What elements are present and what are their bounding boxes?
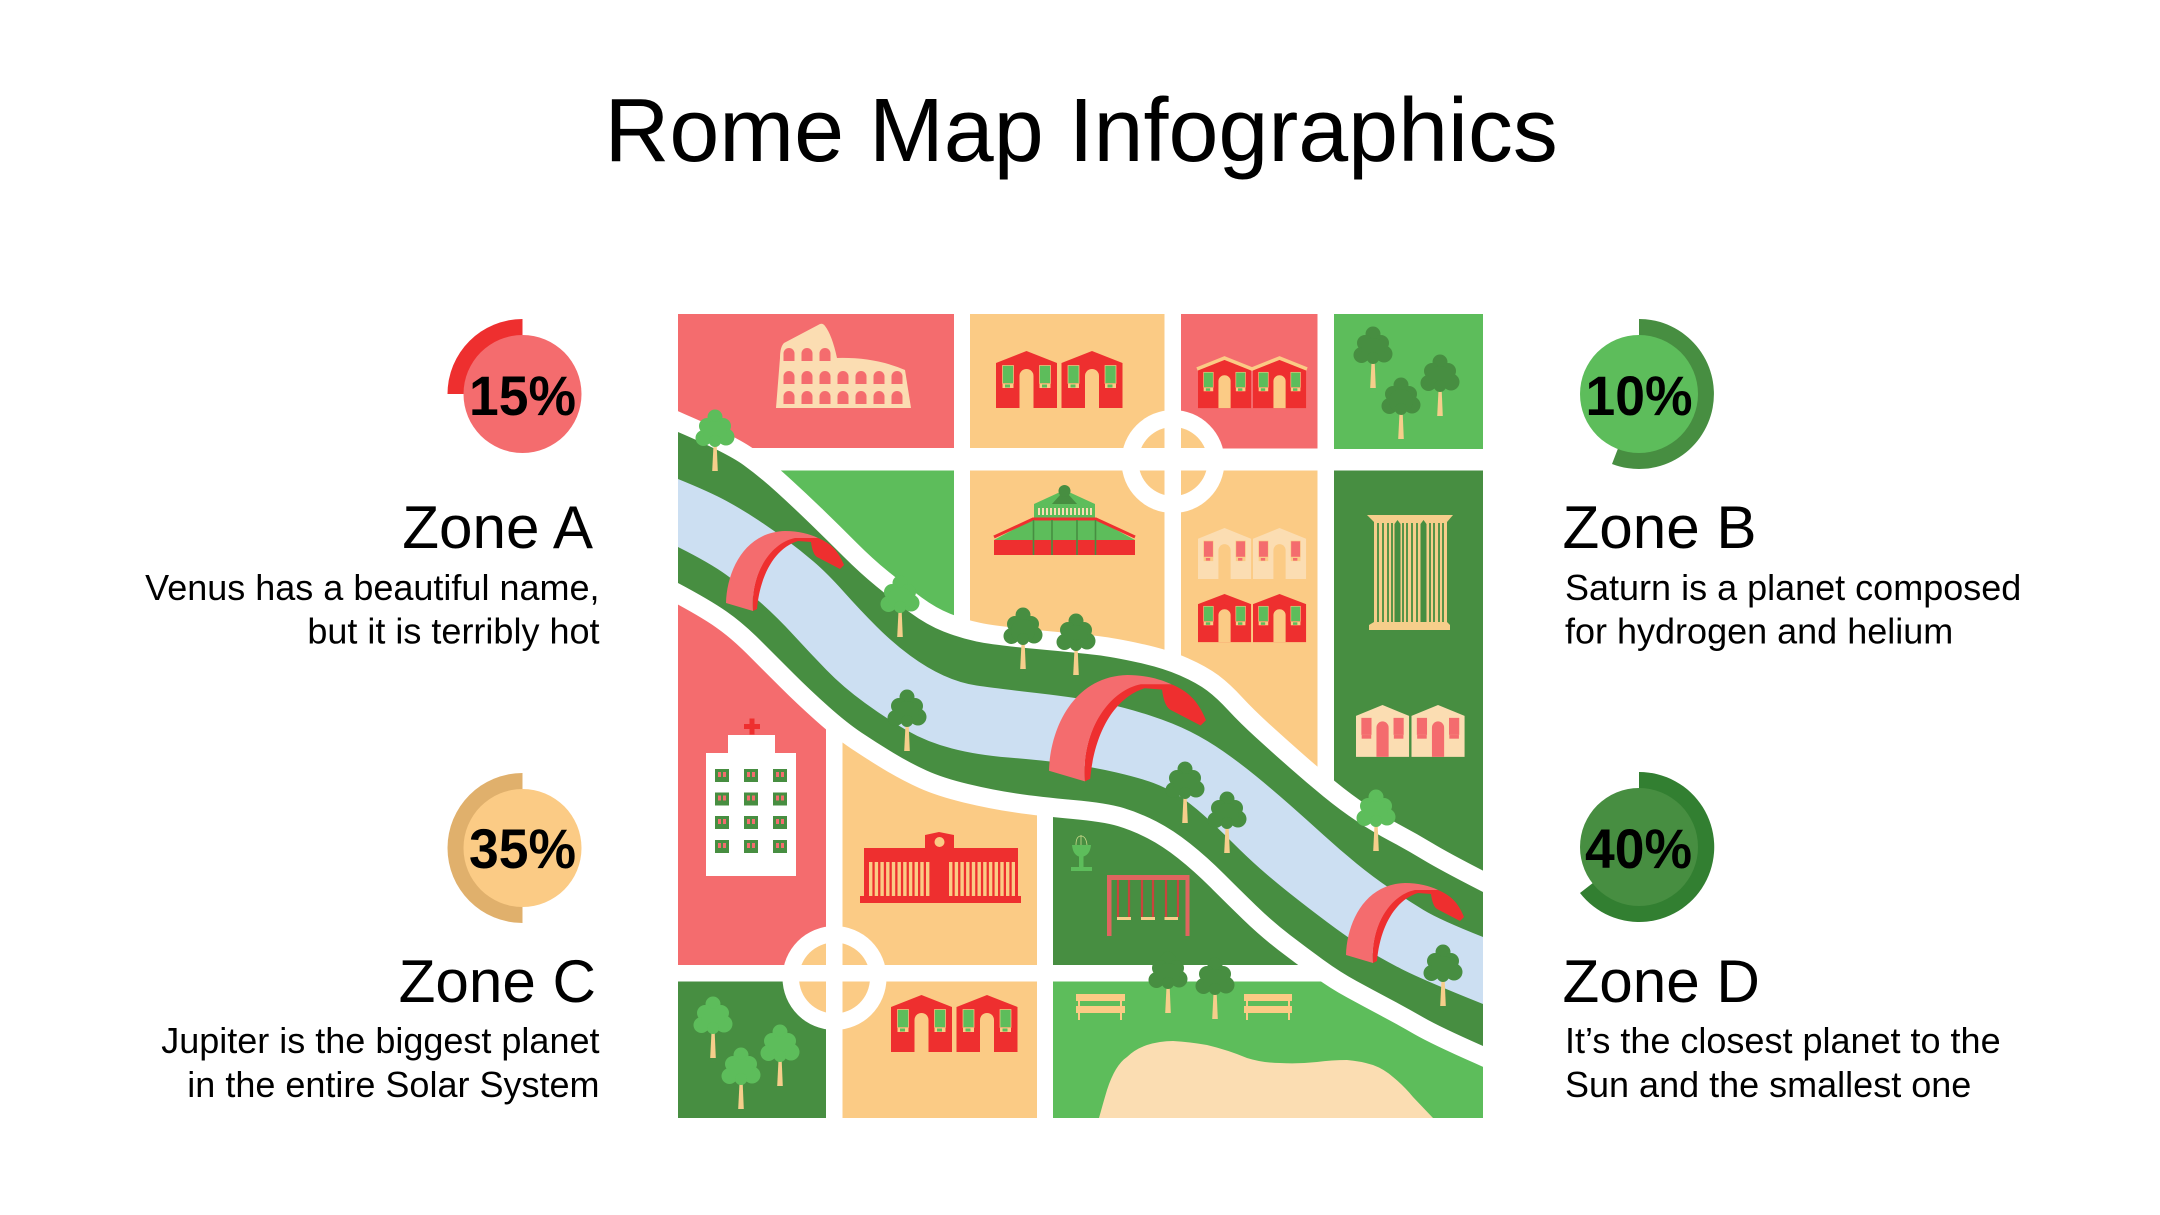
lower river road bbox=[620, 553, 1540, 1072]
icon: red houses with orange roofs bbox=[1197, 358, 1307, 408]
icon: green roof pavilion bbox=[994, 485, 1135, 555]
sand area bbox=[1099, 1041, 1433, 1118]
percent ring: 40%: 40% bbox=[1585, 817, 1692, 880]
description: Zone C: in the entire Solar System bbox=[187, 1064, 600, 1105]
bridge 3 bbox=[1346, 883, 1464, 963]
icon: fountain bbox=[1071, 835, 1092, 871]
map blocks bbox=[678, 314, 1483, 1118]
percent ring: 35%: 35% bbox=[469, 817, 576, 880]
roundabout: south bbox=[782, 926, 886, 1030]
percent ring: 35% bbox=[448, 773, 582, 923]
bridge 2 bbox=[1049, 675, 1206, 781]
icon: red houses, south block bbox=[891, 995, 1018, 1052]
heading: Zone B: Zone B bbox=[1562, 494, 1757, 561]
map of Rome bbox=[678, 314, 1483, 1118]
description: Zone A: but it is terribly hot bbox=[307, 610, 600, 652]
trees bbox=[694, 326, 1462, 1109]
description: Zone D: It’s the closest planet to the bbox=[1565, 1020, 2001, 1061]
description: Zone C: Jupiter is the biggest planet bbox=[161, 1020, 600, 1061]
bridge 1 bbox=[726, 531, 844, 611]
heading: Zone C: Zone C bbox=[399, 948, 596, 1015]
percent ring: 10%: 10% bbox=[1586, 364, 1692, 427]
icon: swing set bbox=[1107, 875, 1190, 936]
icon: red houses, orange block bbox=[1198, 594, 1306, 642]
description: Zone D: Sun and the smallest one bbox=[1565, 1064, 1971, 1105]
panel: Zone B bbox=[1562, 319, 2021, 652]
heading: Zone A: Zone A bbox=[402, 494, 594, 561]
description: Zone B: Saturn is a planet composed bbox=[1565, 567, 2021, 608]
icon: column temple bbox=[1367, 515, 1453, 630]
icon: bench right bbox=[1244, 994, 1292, 1020]
description: Zone A: Venus has a beautiful name, bbox=[145, 567, 600, 608]
icon: colosseum bbox=[776, 324, 911, 408]
percent ring: 10% bbox=[1580, 319, 1714, 469]
panel: Zone C bbox=[161, 773, 600, 1105]
percent ring: 40% bbox=[1580, 772, 1714, 922]
panel: Zone D bbox=[1562, 772, 2001, 1105]
panel: Zone A bbox=[145, 319, 600, 652]
title: Rome Map Infographics bbox=[604, 81, 1558, 181]
icon: hospital bbox=[706, 718, 796, 876]
icon: railway station bbox=[860, 832, 1021, 903]
icon: pale houses, dark green block bbox=[1356, 705, 1465, 757]
river banks and water bbox=[678, 432, 1483, 1046]
roundabout: north bbox=[1122, 410, 1224, 513]
upper river road bbox=[620, 406, 1540, 922]
icon: pale houses, orange block bbox=[1198, 528, 1306, 579]
icon: bench left bbox=[1076, 994, 1125, 1020]
heading: Zone D: Zone D bbox=[1562, 948, 1760, 1015]
percent ring: 15%: 15% bbox=[469, 364, 576, 427]
description: Zone B: for hydrogen and helium bbox=[1565, 610, 1953, 652]
percent ring: 15% bbox=[448, 319, 582, 453]
icon: red houses, north block bbox=[996, 351, 1122, 408]
